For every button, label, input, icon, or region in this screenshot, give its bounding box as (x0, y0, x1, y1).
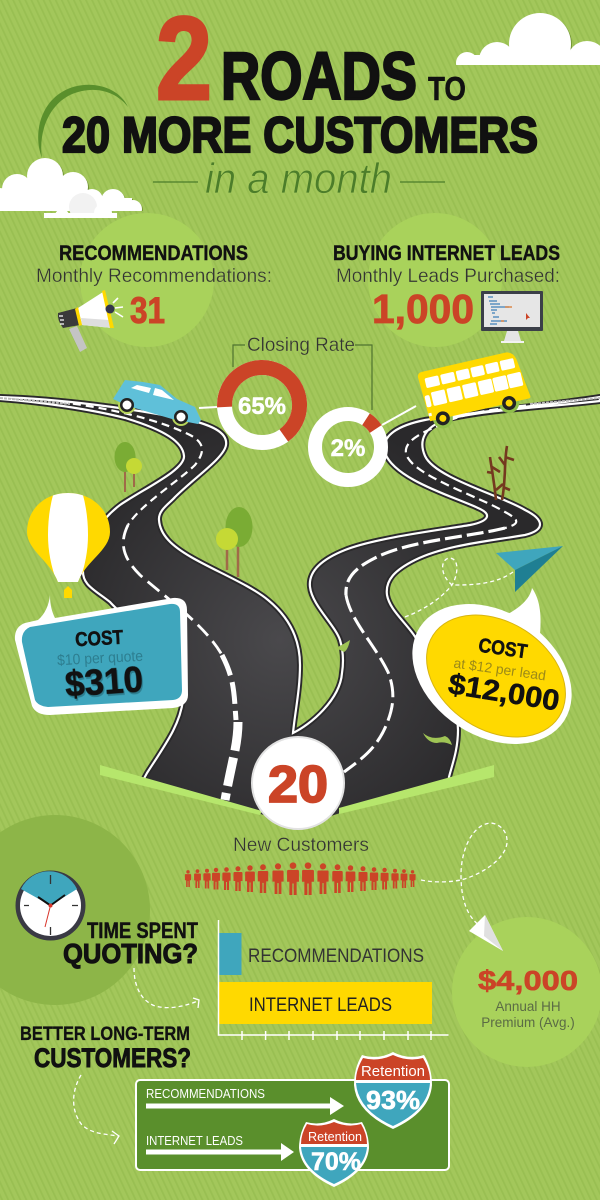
badge: 20: 20 (268, 756, 328, 814)
callout: recommendation cost: $10 per quote (57, 648, 143, 669)
road (0, 397, 600, 845)
new customers label: New Customers (233, 835, 369, 856)
heading: better long-term customers: CUSTOMERS? (34, 1043, 191, 1073)
icon: car (113, 380, 201, 426)
panel: recommendations (36, 213, 272, 352)
callout: internet leads cost (386, 575, 598, 773)
closing rate label (233, 334, 372, 410)
bar chart: time spent (218, 920, 448, 1040)
heading: better long-term customers: BETTER LONG-TERM (20, 1023, 190, 1045)
callout: recommendation cost: $310 (64, 658, 144, 705)
arrow: dashed to bar chart (134, 968, 199, 1008)
trees: middle pair (216, 507, 252, 577)
donut chart: 65%: 65% (238, 393, 286, 420)
icon: hot air balloon (27, 488, 110, 598)
icon: computer monitor (481, 291, 543, 343)
heading: time spent quoting (63, 918, 198, 969)
panel: premium circle (452, 917, 600, 1067)
donut chart: 65% (224, 367, 300, 442)
bar chart: time spent: RECOMMENDATIONS (248, 946, 424, 967)
trees: left pair (114, 442, 142, 492)
shield: retention 70% (299, 1119, 369, 1187)
arrow: recommendations (146, 1097, 344, 1115)
donut chart: 2%: 2% (331, 435, 365, 462)
panel: time spent background circle (0, 815, 150, 1005)
people row: 20 customers (185, 862, 416, 895)
heading: better long-term customers (20, 1023, 191, 1073)
decorative arc (38, 85, 128, 158)
panel: recommendations: 31 (130, 290, 165, 331)
icon: teal paper plane (496, 546, 563, 592)
callout: recommendation cost: COST (75, 627, 124, 651)
bottom green line: left (100, 765, 262, 815)
premium text: Premium (Avg.) (481, 1015, 575, 1030)
icon: white paper plane (469, 915, 503, 951)
shield: retention 93%: Retention (361, 1063, 425, 1080)
road crack: notch (336, 640, 350, 652)
panel: retention (136, 1080, 449, 1170)
shield: retention 93% (354, 1052, 432, 1129)
connector: bus to donut (382, 406, 416, 425)
title: TO (428, 70, 466, 107)
cloud: left (0, 158, 142, 223)
connector: car to donut (199, 407, 217, 408)
panel: recommendations: Monthly Recommendations: (36, 265, 272, 287)
icon: clock (16, 870, 86, 940)
arrow: internet leads (146, 1143, 294, 1161)
title: 20 MORE CUSTOMERS (62, 107, 538, 163)
premium text: $4,000 (478, 965, 578, 996)
shield: retention 70%: 70% (311, 1148, 361, 1176)
panel: buying internet leads: BUYING INTERNET LEADS (333, 242, 560, 265)
shield: retention 70%: Retention (308, 1129, 362, 1144)
heading: time spent quoting: TIME SPENT (87, 918, 198, 943)
donut chart: 2% (315, 414, 381, 480)
premium text (478, 965, 578, 1030)
panel: recommendations: RECOMMENDATIONS (59, 242, 248, 265)
shield: retention 93%: 93% (366, 1085, 420, 1115)
title: ROADS (221, 39, 417, 114)
horizon lines (0, 398, 600, 404)
panel: buying internet leads: 1,000 (372, 286, 474, 332)
icon: double decker bus (417, 349, 533, 431)
icon: thorny bush (487, 446, 514, 500)
closing rate label: Closing Rate (247, 334, 355, 356)
premium text: Annual HH (495, 999, 561, 1014)
title (62, 0, 538, 163)
dashed path: people to premium (421, 823, 507, 926)
callout: internet leads cost: COST (477, 635, 529, 663)
badge: 20 (252, 737, 344, 829)
panel: buying internet leads (333, 213, 560, 347)
road crack: edge (423, 733, 452, 745)
callout: recommendation cost (15, 595, 188, 715)
callout: internet leads cost: $12,000 (446, 668, 562, 718)
icon: megaphone (58, 290, 123, 352)
bottom green line: right (339, 765, 494, 814)
cloud: top right (456, 13, 600, 65)
dashed path: teal plane (402, 558, 513, 618)
bar chart: time spent: INTERNET LEADS (249, 995, 392, 1016)
callout: internet leads cost: at $12 per lead (453, 655, 547, 683)
arrow: dashed to retention panel (74, 1075, 119, 1144)
panel: retention: RECOMMENDATIONS (146, 1087, 265, 1101)
panel: buying internet leads: Monthly Leads Purchased: (336, 265, 560, 287)
heading: time spent quoting: QUOTING? (63, 938, 198, 969)
panel: retention: INTERNET LEADS (146, 1134, 243, 1148)
subtitle: in a month (205, 155, 392, 203)
